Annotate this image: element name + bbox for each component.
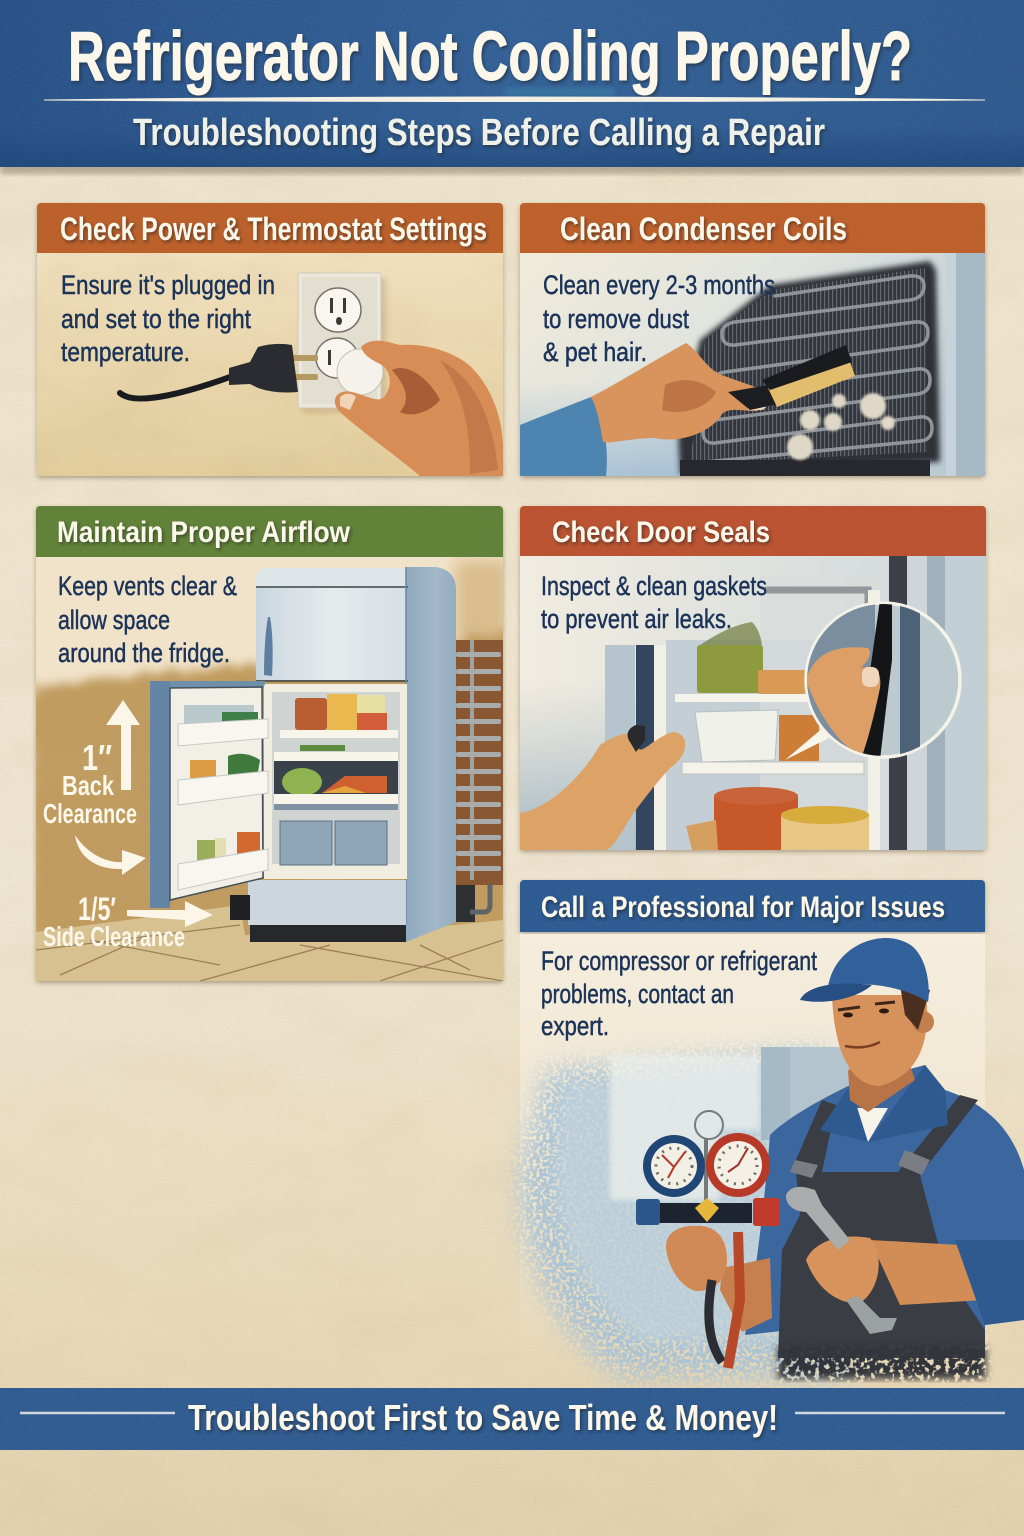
condenser coils behind fridge [455, 640, 503, 922]
neck and face [848, 1050, 915, 1112]
panel 5 text: problems, contact an [541, 979, 734, 1009]
panel 3 text: Keep vents clear & [58, 571, 237, 601]
hoses [709, 1280, 722, 1362]
overalls [778, 1095, 985, 1358]
panel 1 text [61, 270, 275, 367]
panel 1 text: and set to the right [61, 304, 251, 334]
panel: check door seals [520, 506, 986, 850]
panel 3 text [58, 571, 237, 668]
panel 5 text: expert. [541, 1011, 609, 1041]
clearance labels: Side Clearance [43, 921, 185, 952]
collar and undershirt [851, 1108, 888, 1142]
shirt [745, 1065, 1024, 1345]
fridge body [150, 567, 456, 942]
magnifier callout [785, 600, 960, 760]
panel 2 text: to remove dust [543, 304, 689, 334]
wrench [786, 1187, 850, 1250]
panel 4 text: to prevent air leaks. [541, 604, 732, 634]
panel 3 text: around the fridge. [58, 638, 230, 668]
clearance labels: 1″ [82, 737, 112, 778]
panel: call a professional [520, 880, 1024, 1385]
footer banner [0, 1388, 1024, 1450]
illustration: open fridge [30, 560, 510, 981]
cap [828, 938, 929, 1002]
illustration: technician [636, 938, 1024, 1379]
panel 4 header [520, 506, 986, 556]
panel 3 header: Maintain Proper Airflow [57, 516, 351, 549]
clearance labels [43, 737, 185, 952]
panel 5 header [520, 880, 985, 932]
subtitle: Troubleshooting Steps Before Calling a Repair [133, 112, 825, 154]
panel 1 header: Check Power & Thermostat Settings [60, 211, 487, 247]
clearance labels: Clearance [43, 798, 137, 829]
panel 2 text: & pet hair. [543, 337, 647, 367]
open door [150, 681, 268, 908]
illustration: fridge interior [520, 556, 986, 850]
panel 4 text [541, 571, 767, 634]
panel 1 text: Ensure it's plugged in [61, 270, 275, 300]
shelf items [675, 622, 869, 850]
clearance arrows [75, 700, 213, 927]
right arm and hand [870, 1240, 985, 1305]
title divider [44, 97, 985, 102]
panel 4 text: Inspect & clean gaskets [541, 571, 767, 601]
panel: maintain proper airflow [30, 506, 510, 981]
panel 5 text: For compressor or refrigerant [541, 946, 817, 976]
panel: clean condenser coils [520, 203, 985, 476]
footer message: Troubleshoot First to Save Time & Money! [188, 1397, 778, 1438]
icon: outlet, plug and hand [120, 273, 503, 476]
panel: check power and thermostat settings [37, 203, 503, 476]
panel 5 text [541, 946, 817, 1041]
header banner [0, 0, 1024, 174]
food on shelves [274, 694, 398, 865]
panel 3 header [36, 506, 503, 557]
panel 2 header [520, 203, 985, 253]
left arm and hand [720, 1258, 772, 1332]
clearance labels: 1/5′ [78, 891, 116, 927]
panel 2 text [543, 270, 775, 367]
clearance labels: Back [62, 770, 114, 801]
panel 2 header: Clean Condenser Coils [560, 211, 847, 247]
panel 2 text: Clean every 2-3 months [543, 270, 775, 300]
manifold gauges [636, 1111, 780, 1226]
panel 3 text: allow space [58, 605, 170, 635]
hand on door [520, 732, 685, 850]
frosty blue background with fridge [520, 1047, 850, 1380]
panel 4 header: Check Door Seals [552, 516, 770, 549]
panel 1 text: temperature. [61, 337, 190, 367]
panel 1 header [37, 203, 503, 253]
illustration: coil, brush and hand [520, 253, 985, 476]
